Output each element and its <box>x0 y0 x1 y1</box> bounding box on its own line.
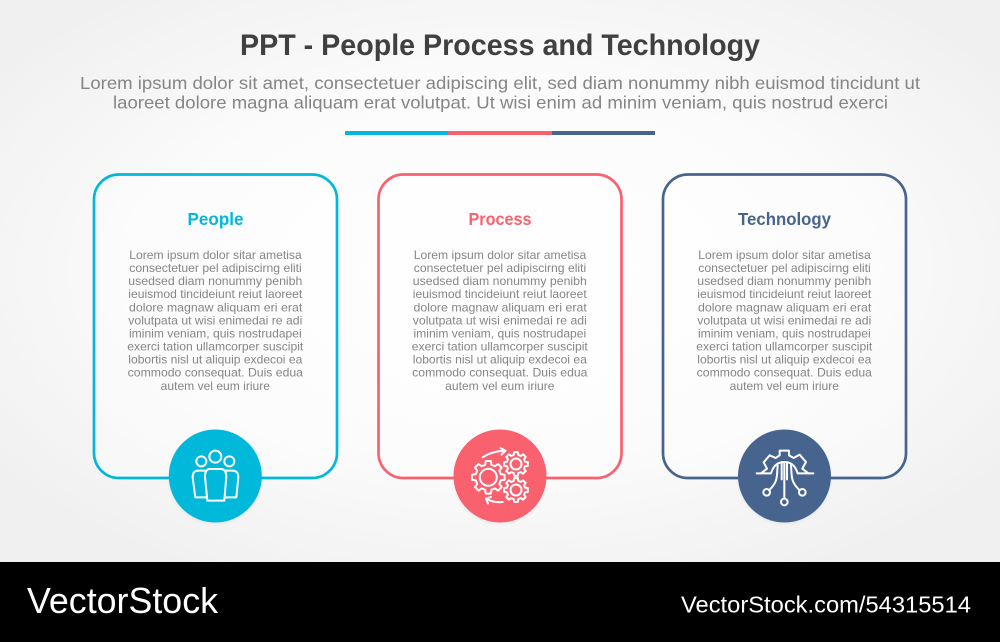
process body text: lobortis nisl ut aliquip exdecoi ea <box>413 353 587 367</box>
panel: process <box>378 174 622 526</box>
people body text: dolore magnaw aliquam eri erat <box>129 300 303 314</box>
process body text: dolore magnaw aliquam eri erat <box>414 300 587 314</box>
people body text <box>127 248 304 393</box>
icon: gears circle <box>451 428 549 526</box>
subtitle text <box>80 73 920 112</box>
technology body text: iminim veniam, quis nostrudapei <box>698 326 871 340</box>
title: PPT - People Process and Technology <box>240 29 760 62</box>
watermark id text: VectorStock.com/54315514 <box>681 592 971 618</box>
process card outline <box>378 174 622 478</box>
technology body text: consectetuer pel adipiscirng eliti <box>698 261 871 275</box>
people body text: iminim veniam, quis nostrudapei <box>129 326 302 340</box>
people body text: exerci tation ullamcorper suscipit <box>127 340 304 354</box>
subtitle text: Lorem ipsum dolor sit amet, consectetuer adipiscing elit, sed diam nonummy nibh euismod tincidunt ut <box>80 73 920 93</box>
people body text: ieuismod tincideiunt reiut laoreet <box>128 287 303 301</box>
people body text: autem vel eum iriure <box>161 379 270 393</box>
process body text: autem vel eum iriure <box>445 379 555 393</box>
technology body text: ieuismod tincideiunt reiut laoreet <box>697 287 872 301</box>
technology body text: exerci tation ullamcorper suscipit <box>696 340 873 354</box>
panel: technology <box>663 174 906 526</box>
people body text: usedsed diam nonummy penibh <box>128 274 302 288</box>
process body text: iminim veniam, quis nostrudapei <box>414 326 586 340</box>
people body text: commodo consequat. Duis edua <box>128 366 303 380</box>
technology body text <box>696 248 873 393</box>
process body text: consectetuer pel adipiscirng eliti <box>414 261 586 275</box>
panel: people <box>94 174 337 526</box>
people body text: Lorem ipsum dolor sitar ametisa <box>129 248 302 262</box>
process body text: commodo consequat. Duis edua <box>412 366 588 380</box>
process heading: Process <box>468 209 532 229</box>
process body text: ieuismod tincideiunt reiut laoreet <box>413 287 587 301</box>
process body text: usedsed diam nonummy penibh <box>413 274 587 288</box>
people body text: consectetuer pel adipiscirng eliti <box>129 261 302 275</box>
technology card outline <box>663 174 906 478</box>
process body text <box>412 248 588 393</box>
people heading: People <box>188 209 244 229</box>
technology body text: commodo consequat. Duis edua <box>697 366 872 380</box>
tri-colour divider <box>345 131 655 135</box>
process body text: Lorem ipsum dolor sitar ametisa <box>414 248 587 262</box>
technology body text: dolore magnaw aliquam eri erat <box>698 300 872 314</box>
technology body text: lobortis nisl ut aliquip exdecoi ea <box>697 353 872 367</box>
subtitle text: laoreet dolore magna aliquam erat volutpat. Ut wisi enim ad minim veniam, quis nostrud exerci <box>113 92 888 112</box>
icon: people circle <box>166 428 264 526</box>
people card outline <box>94 174 337 478</box>
watermark logo text: VectorStock <box>27 580 219 621</box>
people body text: volutpata ut wisi enimedai re adi <box>128 313 302 327</box>
technology body text: usedsed diam nonummy penibh <box>697 274 871 288</box>
technology heading: Technology <box>738 209 831 229</box>
icon: circuit gear circle <box>736 428 834 526</box>
technology body text: Lorem ipsum dolor sitar ametisa <box>698 248 871 262</box>
technology body text: volutpata ut wisi enimedai re adi <box>697 313 871 327</box>
footer bar <box>0 562 1000 642</box>
technology body text: autem vel eum iriure <box>730 379 839 393</box>
people body text: lobortis nisl ut aliquip exdecoi ea <box>128 353 303 367</box>
process body text: exerci tation ullamcorper suscipit <box>412 340 588 354</box>
process body text: volutpata ut wisi enimedai re adi <box>413 313 587 327</box>
